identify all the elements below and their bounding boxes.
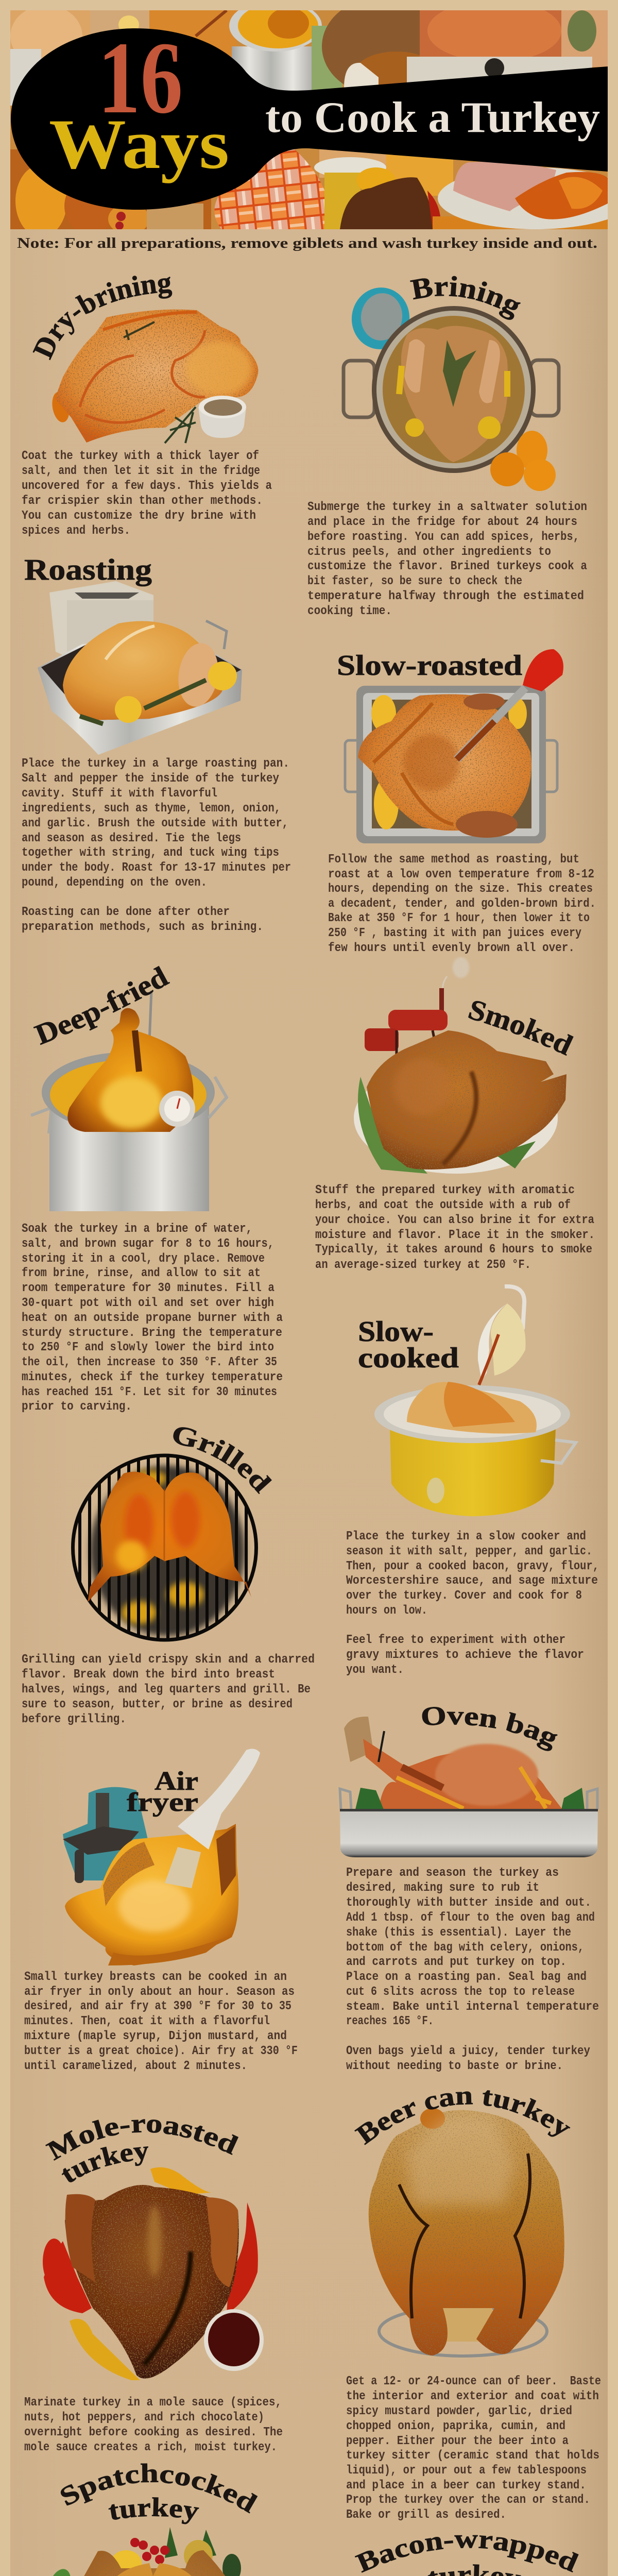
text block: Deep-fried: sturdy structure. Bring the temperature bbox=[22, 1326, 282, 1340]
text block: Mole-roasted turkey: mole sauce creates a rich, moist turkey. bbox=[24, 2441, 277, 2454]
panel: Bacon-wrapped turkey bbox=[354, 2535, 579, 2576]
text block: Oven bag: cut 6 slits across the top to release bbox=[346, 1985, 575, 1999]
text block: Grilled bbox=[22, 1653, 315, 1726]
illustration: fryer pot with thermometer bbox=[31, 991, 227, 1211]
text block: Air fryer: air fryer in only about an hour. Season as bbox=[24, 1985, 295, 1999]
text block: Dry-brining bbox=[22, 449, 272, 538]
text block: Roasting: and season as desired. Tie the legs bbox=[22, 832, 241, 845]
text block: Slow-roasted: Follow the same method as roasting, but bbox=[328, 853, 579, 867]
panel: Deep-fried bbox=[22, 965, 283, 1414]
text block: Roasting: pound, depending on the oven. bbox=[22, 876, 207, 890]
text block: Dry-brining: You can customize the dry brine with bbox=[22, 509, 256, 523]
text block: Brining: temperature halfway through the estimated bbox=[307, 589, 584, 603]
text block: Brining: bit faster, so be sure to check the bbox=[307, 574, 522, 588]
black skillet shape bbox=[11, 28, 608, 210]
illustration: dry-brined turkey with ramekin and rosemary bbox=[50, 310, 258, 443]
heading: Oven bag: Oven bag bbox=[422, 1707, 558, 1751]
illustration: air fryer, basting brush and buttered turkey bbox=[63, 1749, 260, 1965]
heading: Air fryer bbox=[127, 1767, 198, 1817]
text block: Slow-cooked: over the turkey. Cover and cook for 8 bbox=[346, 1589, 582, 1603]
text block: Oven bag bbox=[346, 1866, 599, 2073]
panel: Air fryer bbox=[24, 1749, 298, 2073]
text block: Dry-brining: far crispier skin than other methods. bbox=[22, 494, 263, 508]
text block: Roasting: Salt and pepper the inside of the turkey bbox=[22, 772, 279, 786]
text block: Deep-fried bbox=[22, 1222, 283, 1414]
text block: Smoked: herbs, and coat the outside with a rub of bbox=[315, 1198, 571, 1212]
heading: Dry-brining: Dry-brining bbox=[33, 276, 172, 361]
illustration: mole-roasted turkey with peppers and sauce bbox=[43, 2167, 264, 2380]
text block: Oven bag: Place on a roasting pan. Seal bag and bbox=[346, 1970, 587, 1984]
text block: Dry-brining: salt, and then let it sit in the fridge bbox=[22, 464, 260, 478]
text block: Air fryer: until caramelized, about 2 minutes. bbox=[24, 2059, 247, 2073]
text block: Deep-fried: 30-quart pot with oil and set over high bbox=[22, 1296, 274, 1310]
heading: Slow-cooked bbox=[358, 1316, 459, 1374]
text block: Roasting: cavity. Stuff it with flavorful bbox=[22, 787, 217, 801]
illustration: red smoker and smoked turkey on a plate bbox=[354, 957, 566, 1174]
text block: Slow-cooked: you want. bbox=[346, 1663, 404, 1677]
title: 16: 16 bbox=[98, 21, 183, 135]
text block: Roasting: preparation methods, such as brining. bbox=[22, 920, 263, 934]
title: to Cook a Turkey: to Cook a Turkey bbox=[265, 93, 600, 142]
heading: Beer can turkey: Beer can turkey bbox=[354, 2090, 571, 2145]
text block: Roasting: under the body. Roast for 13-17 minutes per bbox=[22, 861, 291, 875]
panel: Slow-roasted bbox=[328, 649, 596, 955]
text block: Deep-fried: the oil, then increase to 350 °F. After 35 bbox=[22, 1355, 277, 1369]
text block: Oven bag: Prepare and season the turkey as bbox=[346, 1866, 559, 1880]
heading: Slow-cooked: Slow- bbox=[358, 1316, 434, 1348]
text block: Grilled: sure to season, butter, or brine as desired bbox=[22, 1698, 293, 1711]
text block: Air fryer bbox=[24, 1970, 298, 2073]
text block: Roasting: ingredients, such as thyme, lemon, onion, bbox=[22, 802, 281, 816]
text block: Air fryer: desired, and air fry at 390 °F for 30 to 35 bbox=[24, 1999, 291, 2013]
text block: Slow-roasted: few hours until evenly brown all over. bbox=[328, 941, 575, 955]
text block: Mole-roasted turkey bbox=[24, 2396, 283, 2454]
text block: Brining: customize the flavor. Brined turkeys cook a bbox=[307, 560, 587, 573]
text block: Roasting: Place the turkey in a large roasting pan. bbox=[22, 757, 289, 771]
text block: Mole-roasted turkey: Marinate turkey in a mole sauce (spices, bbox=[24, 2396, 282, 2410]
panel: Smoked bbox=[315, 957, 595, 1272]
text block: Slow-roasted bbox=[328, 853, 596, 955]
heading: Spatchcocked turkey: Spatchcocked bbox=[61, 2463, 258, 2513]
illustration: turkey in oven bag in silver pan bbox=[340, 1717, 598, 1857]
text block: Deep-fried: from brine, rinse, and allow to sit at bbox=[22, 1266, 261, 1280]
panel: Grilled bbox=[22, 1427, 315, 1726]
text block: Slow-cooked: Place the turkey in a slow cooker and bbox=[346, 1530, 586, 1544]
text block: Mole-roasted turkey: overnight before cooking as desired. The bbox=[24, 2426, 283, 2439]
panel: Roasting bbox=[22, 553, 291, 934]
text block: Deep-fried: Soak the turkey in a brine of water, bbox=[22, 1222, 252, 1236]
illustration: beer can turkey on a stand bbox=[369, 2108, 564, 2356]
text block: Deep-fried: has reached 151 °F. Let sit for 30 minutes bbox=[22, 1385, 277, 1399]
text block: Smoked: an average-sized turkey at 250 °F. bbox=[315, 1258, 531, 1272]
text block: Brining: Submerge the turkey in a saltwater solution bbox=[307, 500, 587, 514]
text block: Beer can turkey: spicy mustard powder, garlic, dried bbox=[346, 2404, 572, 2418]
text block: Roasting: and garlic. Brush the outside with butter, bbox=[22, 817, 288, 831]
heading: Grilled: Grilled bbox=[173, 1427, 272, 1494]
panel: Dry-brining bbox=[22, 276, 272, 538]
panel: Mole-roasted turkey bbox=[24, 2119, 283, 2454]
text block: Brining: citrus peels, and other ingredients to bbox=[307, 545, 551, 559]
text block: Deep-fried: to 250 °F and slowly lower the bird into bbox=[22, 1341, 274, 1354]
text block: Slow-cooked: gravy mixtures to achieve the flavor bbox=[346, 1648, 584, 1662]
text block: Oven bag: desired, making sure to rub it bbox=[346, 1881, 539, 1895]
note line: Note: For all preparations, remove giblets and wash turkey inside and out. bbox=[17, 235, 597, 251]
heading: Spatchcocked turkey: turkey bbox=[108, 2497, 199, 2524]
illustration: roasting pan with turkey and red baster bbox=[345, 649, 563, 843]
heading: Mole-roasted turkey bbox=[45, 2119, 238, 2182]
panel: Oven bag bbox=[338, 1707, 599, 2073]
text block: Roasting: together with string, and tuck wing tips bbox=[22, 846, 279, 860]
text block: Oven bag: and carrots and put turkey on top. bbox=[346, 1955, 566, 1969]
text block: Brining: before roasting. You can add spices, herbs, bbox=[307, 530, 579, 544]
text block: Deep-fried: room temperature for 30 minutes. Fill a bbox=[22, 1281, 274, 1295]
text block: Grilled: flavor. Break down the bird into breast bbox=[22, 1668, 275, 1682]
heading: Mole-roasted turkey: Mole-roasted bbox=[45, 2119, 238, 2161]
text block: Roasting bbox=[22, 757, 291, 934]
text block: Beer can turkey: pepper. Either pour the beer into a bbox=[346, 2434, 569, 2448]
text block: Grilled: Grilling can yield crispy skin and a charred bbox=[22, 1653, 315, 1667]
panel: Spatchcocked turkey bbox=[53, 2463, 258, 2576]
collage of turkey dishes bbox=[10, 0, 618, 237]
text block: Roasting: Roasting can be done after other bbox=[22, 905, 230, 919]
illustration: oven and roasting pan with turkey bbox=[38, 581, 242, 755]
text block: Deep-fried: salt, and brown sugar for 8 to 16 hours, bbox=[22, 1237, 274, 1251]
text block: Brining: and place in the fridge for about 24 hours bbox=[307, 515, 577, 529]
text block: Slow-cooked: hours on low. bbox=[346, 1604, 427, 1618]
heading: Air fryer: fryer bbox=[127, 1788, 198, 1817]
panel: Brining bbox=[307, 276, 587, 618]
text block: Beer can turkey: and place in a beer can turkey stand. bbox=[346, 2479, 586, 2493]
heading: Mole-roasted turkey: turkey bbox=[62, 2146, 148, 2182]
text block: Dry-brining: spices and herbs. bbox=[22, 524, 130, 538]
heading: Slow-roasted: Slow-roasted bbox=[337, 650, 522, 682]
title: Ways: Ways bbox=[49, 105, 229, 183]
text block: Mole-roasted turkey: nuts, hot peppers, and rich chocolate) bbox=[24, 2411, 264, 2425]
text block: Deep-fried: storing it in a cool, dry place. Remove bbox=[22, 1252, 265, 1266]
text block: Slow-cooked: Feel free to experiment with other bbox=[346, 1633, 565, 1647]
heading: Brining: Brining bbox=[410, 276, 521, 320]
text block: Beer can turkey bbox=[346, 2375, 601, 2522]
panel: Slow-cooked bbox=[346, 1286, 599, 1677]
heading: Smoked: Smoked bbox=[468, 1001, 574, 1056]
banner: skillet collage header bbox=[10, 0, 618, 237]
illustration: spatchcocked turkey on round grill grate bbox=[71, 1453, 259, 1643]
text block: Smoked: Stuff the prepared turkey with aromatic bbox=[315, 1183, 575, 1197]
text block: Air fryer: minutes. Then, coat it with a flavorful bbox=[24, 2014, 270, 2028]
text block: Brining: cooking time. bbox=[307, 604, 392, 618]
illustration: spatchcocked turkey with berries and herbs bbox=[43, 2527, 259, 2576]
heading: Deep-fried: Deep-fried bbox=[33, 965, 170, 1045]
text block: Grilled: halves, wings, and leg quarters and grill. Be bbox=[22, 1683, 311, 1697]
text block: Smoked bbox=[315, 1183, 595, 1272]
illustration: brining pot with salt bowl and oranges bbox=[344, 284, 559, 491]
text block: Deep-fried: minutes, check if the turkey temperature bbox=[22, 1370, 283, 1384]
text block: Slow-cooked bbox=[346, 1530, 599, 1677]
text block: Oven bag: reaches 165 °F. bbox=[346, 2014, 434, 2028]
heading: Slow-cooked: cooked bbox=[358, 1342, 459, 1374]
text block: Grilled: before grilling. bbox=[22, 1713, 126, 1726]
text block: Dry-brining: uncovered for a few days. This yields a bbox=[22, 479, 272, 493]
text block: Beer can turkey: chopped onion, paprika, cumin, and bbox=[346, 2419, 565, 2433]
text block: Deep-fried: heat on an outside propane burner with a bbox=[22, 1311, 283, 1325]
text block: Beer can turkey: Bake or grill as desired. bbox=[346, 2508, 506, 2522]
illustration: gravy boat pouring into yellow slow cooker bbox=[374, 1286, 576, 1516]
text block: Deep-fried: prior to carving. bbox=[22, 1400, 132, 1414]
text block: Dry-brining: Coat the turkey with a thick layer of bbox=[22, 449, 259, 463]
panel: Beer can turkey bbox=[346, 2090, 601, 2522]
heading: Roasting: Roasting bbox=[24, 553, 152, 586]
text block: Oven bag: shake (this is essential). Layer the bbox=[346, 1926, 571, 1940]
text block: Air fryer: mixture (maple syrup, Dijon mustard, and bbox=[24, 2029, 287, 2043]
text block: Air fryer: Small turkey breasts can be cooked in an bbox=[24, 1970, 287, 1984]
text block: Oven bag: without needing to baste or brine. bbox=[346, 2059, 563, 2073]
heading: Air fryer: Air bbox=[154, 1767, 198, 1796]
text block: Air fryer: butter is a great choice). Air fry at 330 °F bbox=[24, 2044, 298, 2058]
text block: Brining bbox=[307, 500, 587, 618]
